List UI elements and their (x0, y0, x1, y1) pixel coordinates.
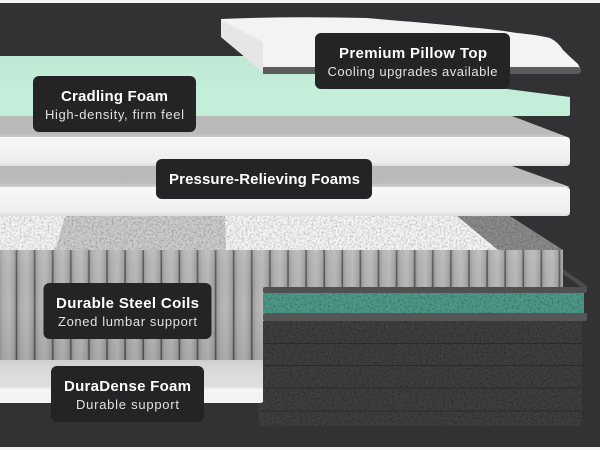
layer: pressure-relieving foam lower (0, 187, 570, 216)
layer: pressure-relieving foam upper (0, 137, 570, 166)
shadow gap below green foam (0, 116, 570, 138)
label: DuraDense Foam: Durable support (76, 397, 179, 412)
label: Premium Pillow Top (315, 33, 510, 89)
label: Cradling Foam (33, 76, 196, 132)
pillow top layer (221, 17, 581, 74)
label: Cradling Foam: High-density, firm feel (45, 107, 184, 122)
label: Premium Pillow Top: Premium Pillow Top (339, 45, 487, 62)
label: DuraDense Foam (51, 366, 204, 422)
layer: cradling green foam (0, 56, 570, 116)
label: Durable Steel Coils (44, 283, 212, 339)
layer: top of coil unit (0, 216, 563, 252)
label: Pressure-Relieving Foams (156, 159, 372, 199)
layer: DuraDense base foam (0, 360, 263, 403)
label: DuraDense Foam: DuraDense Foam (64, 378, 191, 395)
label: Durable Steel Coils: Zoned lumbar support (58, 314, 197, 329)
label: Pressure-Relieving Foams: Pressure-Relieving Foams (169, 171, 360, 188)
label: Cradling Foam: Cradling Foam (61, 88, 168, 105)
layer: steel coils (0, 250, 563, 360)
cutaway panel (258, 269, 587, 426)
label: Durable Steel Coils: Durable Steel Coils (56, 295, 199, 312)
label: Premium Pillow Top: Cooling upgrades available (328, 64, 498, 79)
shadow gap between foams (0, 166, 570, 187)
